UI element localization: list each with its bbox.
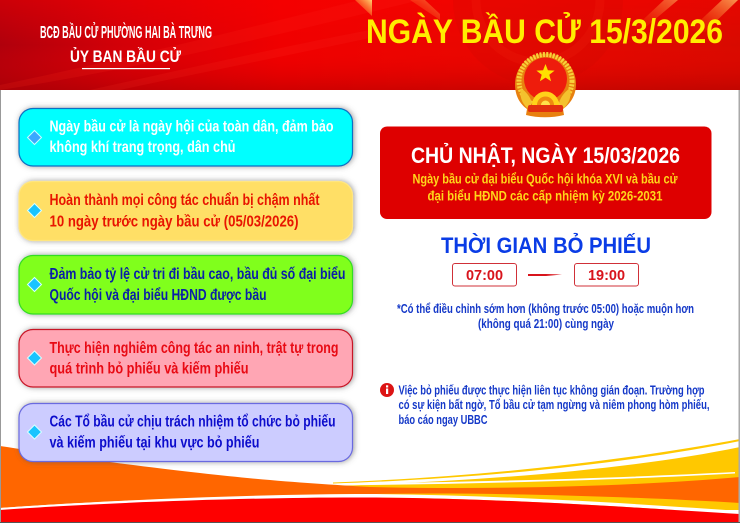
icon: diamond bullet	[28, 351, 42, 365]
panel: card 2	[19, 182, 352, 240]
date subtitle	[412, 172, 678, 204]
card 5 text	[50, 412, 336, 452]
icon: diamond bullet	[28, 278, 42, 292]
card 3 text: Đảm bảo tỷ lệ cử tri đi bầu cao, bầu đủ số đại biểu	[50, 265, 346, 283]
end time	[574, 264, 638, 286]
panel: card 1	[19, 108, 352, 166]
card 4 text	[50, 340, 338, 378]
end time: 19:00	[588, 268, 625, 284]
arrow	[528, 274, 562, 276]
card 3 text	[50, 265, 346, 304]
icon: diamond bullet	[28, 425, 42, 439]
card 1 text: không khí trang trọng, dân chủ	[50, 139, 236, 156]
start time	[452, 264, 516, 286]
adjustment note	[397, 302, 694, 331]
icon: national emblem	[515, 53, 576, 117]
card 4 text: quá trình bỏ phiếu và kiếm phiếu	[50, 360, 248, 378]
panel: date box	[380, 126, 712, 219]
icon: info	[380, 383, 394, 397]
organisation name: BCĐ BẦU CỬ PHƯỜNG HAI BÀ TRƯNG	[40, 21, 212, 42]
interruption note: báo cáo ngay UBBC	[398, 413, 488, 427]
card 5 text: Các Tổ bầu cử chịu trách nhiệm tổ chức bỏ phiếu	[50, 412, 336, 430]
voting time range	[452, 264, 638, 286]
card 2 text	[50, 191, 320, 230]
adjustment note: (không quá 21:00) cùng ngày	[478, 317, 614, 331]
panel: card 3	[19, 256, 352, 314]
header organisation block	[40, 21, 212, 69]
icon: diamond bullet	[28, 204, 42, 218]
card 3 text: Quốc hội và đại biểu HĐND được bầu	[50, 286, 266, 304]
panel: card 4	[19, 330, 352, 387]
card 5 text: và kiếm phiếu tại khu vực bỏ phiếu	[50, 434, 260, 452]
card 2 text: Hoàn thành mọi công tác chuẩn bị chậm nhất	[50, 191, 320, 209]
card 4 text: Thực hiện nghiêm công tác an ninh, trật tự trong	[50, 340, 338, 357]
icon: diamond bullet	[28, 130, 42, 144]
header banner	[0, 0, 740, 90]
card 2 text: 10 ngày trước ngày bầu cử (05/03/2026)	[50, 214, 298, 230]
panel: card 5	[19, 404, 352, 462]
card 1 text	[50, 118, 334, 156]
start time: 07:00	[466, 268, 503, 284]
interruption note	[398, 384, 710, 427]
date subtitle: đại biểu HĐND các cấp nhiệm kỳ 2026-2031	[428, 188, 663, 204]
date subtitle: Ngày bầu cử đại biểu Quốc hội khóa XVI và bầu cử	[412, 172, 678, 186]
bottom wave decoration	[0, 439, 740, 523]
card 1 text: Ngày bầu cử là ngày hội của toàn dân, đảm bảo	[50, 118, 334, 136]
voting time heading: THỜI GIAN BỎ PHIẾU	[441, 233, 651, 258]
date heading: CHỦ NHẬT, NGÀY 15/03/2026	[411, 143, 680, 168]
committee name: ỦY BAN BẦU CỬ	[70, 47, 182, 66]
